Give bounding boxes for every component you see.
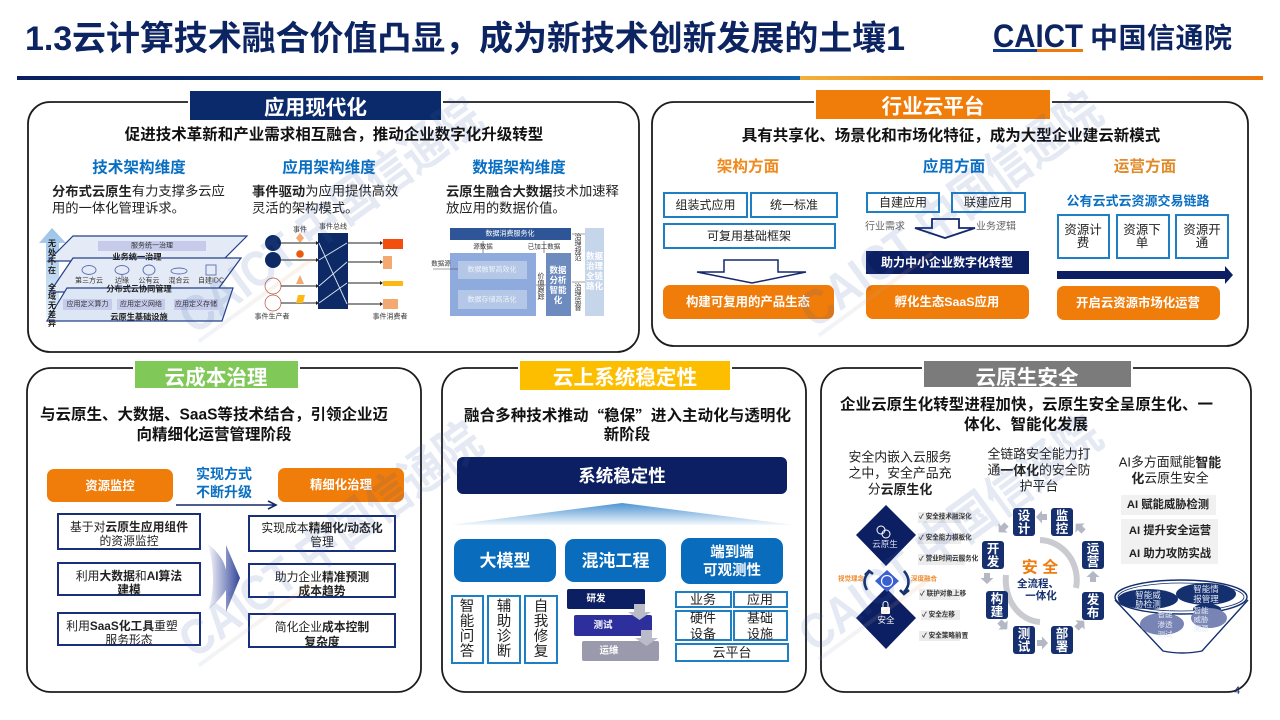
list: 左侧: 利用大数据和AI算法 [76,569,182,583]
column: 大模型: 智 [460,598,474,615]
list: 左侧: 的资源监控 [100,534,159,548]
column: AI 赋能 [1115,454,1248,653]
column: 一体化安全环: 构 [991,591,1003,606]
list: 左侧: 建模 [117,583,141,597]
list: 左侧: 基于对云原生应用组件 [70,520,188,534]
column: 一体化安全环: 通一体化的安全防 [987,462,1091,478]
subtitle: 与云原生、大数据、SaaS等技术结合，引领企业迈 [40,404,388,424]
column: 一体化安全环: 全流程、 [1017,577,1059,590]
column: 混沌工程 [565,539,666,661]
logo: CAICT 中国信通院: CAICT [993,18,1083,54]
diagram: 云原生分层架构: 不 [48,256,56,266]
arrow: 渐变箭头 [207,543,240,612]
subtitle [40,404,388,444]
column: AI 赋能: AI多方面赋能智能 [1119,454,1221,470]
column: 应用方面: 助力中小企业数字化转型 [881,254,1013,270]
column: 大模型: 答 [460,643,475,660]
panel: 云上系统稳定性 [442,360,806,692]
column: 运营方面: 公有云式云资源交易链路 [1066,194,1210,208]
heading: 行业云平台 [815,89,1051,120]
column: 数据架构维度: 数据架构维度 [472,158,566,176]
column: 架构方面: 组装式应用 [675,197,736,212]
diagram: 数据架构: 价 [538,272,544,280]
diagram: 云原生分层架构: 无 [48,300,56,310]
arrow: 实现方式不断升级 [176,466,276,509]
diagram: 数据架构: 范 [574,252,582,262]
column: 云原生化: 深度融合 [911,574,938,582]
list: 右侧: 成本趋势 [298,584,346,598]
column: 混沌工程: 测试 [593,619,613,631]
box: 资源监控: 资源监控 [85,478,135,493]
diagram: 数据架构: 理 [574,240,582,248]
column: 应用方面: 行业需求 [865,220,905,232]
column: 大模型: 诊 [497,628,512,645]
column: 大模型: 问 [460,628,474,645]
watermark: CAICT 中国信通院 [168,412,492,669]
diagram: 云原生分层架构: 应用定义存储 [175,299,217,308]
column: 运营方面: 运营方面 [1114,156,1176,176]
diagram: 数据架构: 数据 [586,251,603,261]
diagram: 数据架构: 治 [574,282,582,290]
header rule [17,76,1263,80]
column: 应用方面: 应用方面 [923,156,985,176]
column: 大模型: 复 [534,642,548,660]
subtitle: 企业云原生化转型进程加快，云原生安全呈原生化、一 [840,394,1213,414]
column: 运营方面: 单 [1136,236,1148,250]
column: 端到端可观测性: 可观测性 [703,562,761,579]
panel: 行业云平台 [652,89,1248,346]
column: 技术架构维度 [52,158,225,216]
heading: 应用现代化: 应用现代化 [264,96,367,120]
list: 右侧: 管理 [310,535,334,549]
column: 一体化安全环: 测 [1018,626,1030,641]
diagram: 云原生分层架构: 边缘 [115,276,129,284]
diagram: 云原生分层架构: 域 [48,290,57,300]
title: 1.3云计算技术融合价值凸显，成为新技术创新发展的土壤1 [25,20,905,58]
column: 架构方面: 统一标准 [770,198,818,212]
column: 应用方面 [865,156,1029,319]
column: 云原生化: 安全内嵌入云服务 [848,450,952,464]
column: 云原生化: ✓ 联护对象上移 [920,588,967,598]
column: 一体化安全环: 监 [1056,508,1068,523]
banner: 系统稳定性: 系统稳定性 [578,466,666,486]
column: 一体化安全环: 试 [1018,640,1031,654]
box: 资源监控 [47,469,173,502]
diagram: 云原生分层架构: 分布式云协同管理 [106,284,172,294]
column: 应用架构维度: 事件驱动为应用提供高效 [252,182,398,198]
column: 运营方面: 通 [1196,236,1209,250]
diagram: 云原生分层架构: 业务统一治理 [112,252,162,262]
list: 右侧: 实现成本精细化/动态化 [261,521,383,535]
column: 一体化安全环: 布 [1087,605,1099,620]
diagram: 数据架构: 全链 [586,271,603,281]
column: 一体化安全环: 署 [1056,640,1068,654]
diagram: 数据架构: 数据存储高活化 [468,294,516,304]
banner: 系统稳定性 [457,457,787,494]
list: 右侧: 助力企业精准预测 [275,570,369,584]
watermark: CAICT 中国信通院 [788,406,1112,663]
funnel chart: 智能 [1194,604,1209,614]
diagram: 云原生分层架构: 应用定义网络 [120,299,162,308]
diagram: 数据架构: 已加工数据 [528,242,561,250]
panel: 云成本治理 [27,360,421,692]
heading: 云成本治理: 云成本治理 [165,366,268,390]
column: 大模型 [452,539,557,663]
column: 混沌工程: 研发 [586,592,606,604]
column: 云原生化: 之中，安全产品充 [848,466,952,480]
column: 数据架构维度 [446,158,619,216]
column: 架构方面: 构建可复用的产品生态 [686,294,811,309]
list: 右侧: 简化企业成本控制 [275,620,369,634]
diagram: 数据架构 [431,228,604,316]
diagram: 云原生分层架构: 云原生基础设施 [110,312,168,322]
triangle [450,503,794,525]
column: 应用方面: 联建应用 [964,194,1012,210]
subtitle: 融合多种技术推动“稳保”进入主动化与透明化 [464,405,791,427]
diagram: 数据架构: 治 [574,232,582,240]
diagram: 数据架构: 跟 [538,286,544,294]
subtitle: 具有共享化、场景化和市场化特征，成为大型企业建云新模式 [742,126,1161,144]
diagram: 数据架构: 数据融智高效化 [468,264,516,274]
heading: 云上系统稳定性: 云上系统稳定性 [553,366,697,390]
column: 应用方面: 自建应用 [879,194,927,210]
diagram: 云原生分层架构 [39,228,247,328]
column: 技术架构维度: 分布式云原生有力支撑多云应 [52,182,225,198]
panel: 云原生安全 [821,360,1251,692]
diagram: 云原生分层架构: 混合云 [168,276,190,284]
subtitle [840,394,1213,434]
diagram: 云原生分层架构: 公有云 [138,276,160,284]
column: 一体化安全环: 设 [1018,509,1031,523]
diagram: 数据架构: 督 [574,302,582,312]
column: 应用方面: 业务逻辑 [976,220,1016,232]
column: 端到端可观测性: 端到端 [710,544,754,561]
column: 技术架构维度: 用的一体化管理诉求。 [52,200,185,216]
column: 混沌工程: 混沌工程 [582,552,650,570]
watermark: CAICT 中国信通院 [788,82,1112,339]
funnel chart: 渗透 [1158,618,1173,628]
list: 右侧 [249,516,395,649]
list: 左侧: 利用SaaS化工具重塑 [66,619,178,633]
column: 大模型: 修 [534,628,549,645]
column: 应用方面: 孵化生态SaaS应用 [895,294,999,309]
column: 运营方面: 资源计 [1064,223,1102,237]
diagram: 云原生分层架构: 处 [48,246,57,256]
column: 端到端可观测性: 云平台 [712,645,752,660]
arrow: down [915,219,975,238]
funnel chart: 胁检测 [1135,599,1161,609]
column: 运营方面: 开启云资源市场化运营 [1076,295,1200,310]
column: AI 赋能: AI 助力攻防实战 [1129,546,1212,560]
column: 运营方面: 资源开 [1183,223,1221,237]
funnel chart: 智能 [1158,608,1173,618]
funnel chart: 智能威 [1135,590,1161,600]
box: 精细化治理: 精细化治理 [310,477,373,492]
diagram: 数据架构: 化 [554,295,563,305]
column: 端到端可观测性 [676,538,788,661]
column: 端到端可观测性: 设备 [690,626,716,642]
column: 一体化安全环: 营 [1087,554,1099,569]
column: 架构方面: 可复用基础框架 [707,229,791,243]
column: 数据架构维度: 云原生融合大数据技术加速释 [446,182,619,198]
column: 端到端可观测性: 硬件 [690,610,716,626]
diagram: 云原生分层架构: 在 [48,264,56,274]
column: 一体化安全环: 发 [987,554,1000,569]
diagram: 云原生分层架构: 服务统一治理 [131,240,173,250]
column: 应用架构维度: 应用架构维度 [282,158,376,176]
list: 左侧 [58,514,200,647]
column: 架构方面: 架构方面 [717,156,779,176]
funnel chart: 测试 [1158,628,1173,638]
logo: CAICT 中国信通院: 中国信通院 [1090,22,1232,54]
diagram: 数据架构: 智能 [549,285,567,295]
column: 大模型: 能 [460,613,474,630]
heading: 云成本治理 [134,360,299,390]
column: 一体化安全环: 部 [1056,626,1069,641]
column: 运营方面: 费 [1077,236,1089,250]
column: 技术架构维度: 技术架构维度 [92,158,186,176]
column: 一体化安全环: 全链路安全能力打 [987,446,1091,462]
diagram: 云原生分层架构: 差 [48,308,56,318]
column: 架构方面 [663,156,837,319]
column: 云原生化: 安全 [877,615,895,625]
column: 运营方面: 资源下 [1123,223,1161,237]
diagram: 数据架构: 数据 [549,265,567,275]
column: 端到端可观测性: 基础 [747,610,773,626]
diagram: 数据架构: 源数据 [473,242,493,250]
column: 端到端可观测性: 应用 [747,592,773,607]
arrow: 实现方式不断升级: 不断升级 [196,484,252,500]
diagram: 数据架构: 踪 [538,292,544,300]
diagram: 云原生分层架构: 全 [48,282,57,292]
column: 一体化安全环: 建 [991,604,1004,619]
box: 精细化治理 [278,468,404,502]
diagram: 数据架构: 治理 [586,261,603,271]
column: 一体化安全环: 控 [1056,521,1069,536]
column: 端到端可观测性: 业务 [690,592,716,607]
column: 云原生化: 云原生 [872,539,898,549]
arrow: down [697,260,806,283]
column: 应用架构维度: 灵活的架构模式。 [252,200,358,216]
funnel chart: 报管理 [1193,594,1219,604]
subtitle [464,405,791,444]
diagram: 云原生分层架构: 无 [48,238,56,248]
diagram: 云原生分层架构: 第三方云 [75,276,103,284]
column: AI 赋能: AI 赋能威胁检测 [1127,497,1209,511]
list: 左侧: 服务形态 [105,633,153,647]
diagram: 事件驱动架构: 事件生产者 [254,312,290,320]
subtitle: 向精细化运营管理阶段 [136,424,292,444]
column: 端到端可观测性: 设施 [747,626,773,642]
column: 数据架构维度: 放应用的数据价值。 [446,200,566,216]
column: 云原生化: ✓ 安全能力模板化 [919,532,972,542]
column: AI 赋能: AI 提升安全运营 [1129,523,1211,537]
column: 大模型: 助 [497,613,511,630]
column: 应用架构维度 [252,158,398,216]
arrow: right [1057,266,1233,284]
column: 一体化安全环: 一体化 [1025,589,1057,602]
diagram: 云原生分层架构: 异 [48,318,56,328]
page number: 4 [1234,685,1240,697]
diagram: 云原生分层架构: 自建IDC [198,276,224,284]
column: AI 赋能: 化云原生安全 [1131,470,1209,486]
list: 右侧: 复杂度 [304,635,340,649]
diagram: 云原生分层架构: 应用定义算力 [66,299,108,308]
diagram: 数据架构: 规 [574,246,582,254]
diagram: 数据架构: 监 [574,296,582,304]
column: 云原生化: ✓ 安全技术融深化 [919,512,972,520]
column: 云原生化: ✓ 安全左移 [922,610,955,618]
column: 云原生化: 视觉理念 [838,574,864,582]
watermark [168,82,1112,669]
diagram: 数据架构: 数据消费服务化 [486,228,534,238]
arrow: 实现方式不断升级: 实现方式 [196,466,252,482]
diagram: 事件驱动架构: 事件消费者 [372,312,408,320]
subtitle: 体化、智能化发展 [964,414,1088,434]
diagram: 事件驱动架构 [254,222,408,320]
heading: 云上系统稳定性 [519,360,731,391]
column: 一体化安全环 [980,446,1104,654]
funnel chart: 智能情 [1193,584,1219,594]
diagram: 事件驱动架构: 事件总线 [319,222,347,230]
diagram: 数据架构: 数据源 [431,258,451,268]
column: 大模型: 自 [534,598,548,615]
diagram: 数据架构: 理 [574,290,582,298]
subtitle: 促进技术革新和产业需求相互融合，推动企业数字化升级转型 [125,124,543,144]
column: 云原生化: 分云原生化 [868,482,932,496]
heading: 云原生安全 [923,360,1132,390]
column: 一体化安全环: 发 [1087,592,1100,607]
diagram: 事件驱动架构: 事件 [293,224,307,234]
column: 云原生化: ✓ 安全策略前置 [922,630,969,640]
diagram: 数据架构: 路化 [586,281,603,291]
column: 混沌工程: 运维 [599,644,619,656]
watermark: CAICT 中国信通院 [168,88,492,345]
diagram: 数据架构: 值 [538,278,544,286]
heading: 应用现代化 [189,90,442,121]
column: 大模型: 辅 [497,598,511,615]
heading: 行业云平台: 行业云平台 [882,94,984,118]
logo: CAICT 中国信通院 [993,18,1232,54]
column: 云原生化: ✓ 营业时间云服务化 [919,554,979,562]
column: 一体化安全环: 运 [1087,542,1100,556]
funnel chart: 溯源 [1194,622,1209,632]
column: 运营方面 [1057,156,1233,320]
column: 大模型: 我 [534,613,548,630]
column: 一体化安全环: 计 [1018,521,1031,536]
column: 大模型: 大模型 [480,552,530,570]
heading: 云原生安全: 云原生安全 [976,366,1079,390]
panel: 应用现代化 [28,90,639,352]
funnel chart [1115,580,1248,653]
column: 一体化安全环: 护平台 [1020,478,1058,494]
column: 一体化安全环: 安 全 [1022,558,1058,576]
diagram: 数据架构: 分析 [549,275,567,285]
column: 云原生化 [838,450,979,649]
funnel chart: 威胁 [1194,614,1209,624]
column: 大模型: 断 [497,643,511,660]
subtitle: 新阶段 [604,424,651,444]
column: 一体化安全环: 开 [987,542,999,556]
